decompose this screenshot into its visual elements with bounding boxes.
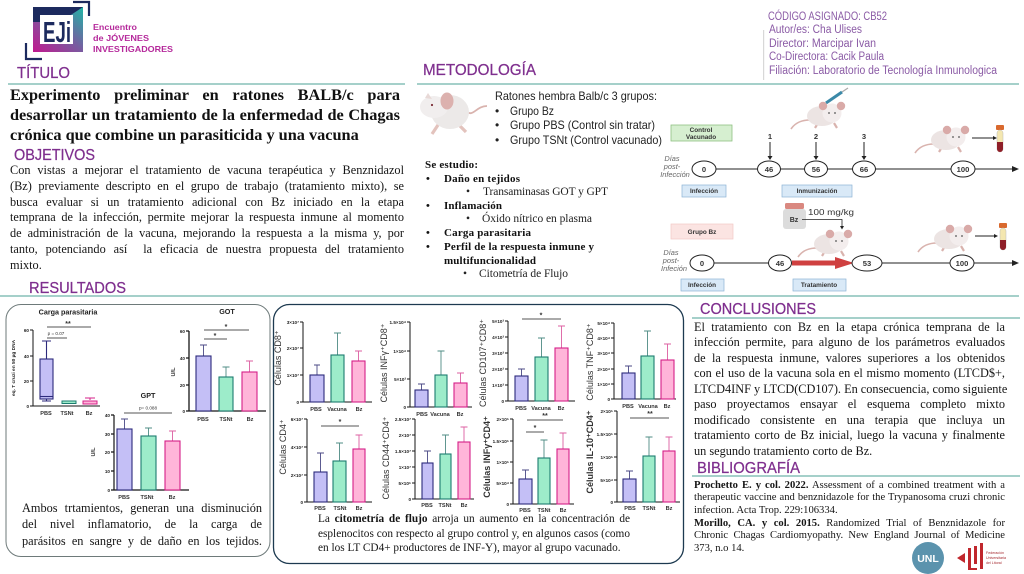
chart: células CD4: 2×10⁷: [291, 473, 303, 478]
chart: GOT: *: [225, 324, 228, 331]
chart: células IL-10 CD4: 1.5×10⁵: [597, 432, 613, 437]
conclusions text: [694, 320, 1007, 458]
chart: células INFγ CD4: 2×10⁵: [496, 417, 509, 422]
chart: GPT: p= 0.088: [139, 406, 157, 410]
timeline: grupo Bz: 46: [776, 259, 784, 268]
chart: células INFγ CD4: Bz: [560, 508, 567, 514]
label: control vacunado: Control: [690, 127, 713, 134]
author block: [768, 10, 998, 77]
objectives text: (Bz) previamente descripto en el grupo de trabajo (tratamiento mixto), se: [10, 179, 404, 193]
chart: células TNF CD8: 1×10⁴: [597, 382, 611, 387]
chart: células TNF CD8: [585, 321, 676, 410]
chart: células CD44 CD4: [381, 416, 474, 509]
chart: carga parasitaria: eq. T cruzi en 50 µg DNA: [11, 339, 17, 396]
timeline: control vacunado: 56: [812, 165, 820, 174]
bibliography text: Morillo, CA. y col. 2015. Randomized Trial of Benznidazole for: [694, 518, 1005, 529]
chart: GPT: TSNt: [140, 495, 154, 501]
chart: células CD107 CD8: Células CD107⁺CD8⁺: [478, 319, 488, 407]
timeline: grupo Bz: 53: [863, 259, 871, 268]
timeline: control vacunado: post-: [663, 162, 681, 171]
timeline: control vacunado: Días: [664, 154, 680, 163]
timeline: grupo Bz: Infeción: [661, 264, 687, 273]
author block: Director: Marcipar Ivan: [769, 38, 876, 50]
chart: células TNF CD8: PBS: [622, 404, 634, 410]
chart: células CD8: Células CD8⁺: [273, 330, 283, 386]
chart: células INFγ CD8: [379, 320, 472, 418]
chart: células CD44 CD4: PBS: [421, 503, 433, 509]
chart: carga parasitaria: **: [65, 321, 71, 328]
heading: conclusiones: CONCLUSIONES: [700, 301, 816, 318]
groups list: Grupo PBS (Control sin tratar): [510, 118, 655, 132]
heading: metodología: METODOLOGÍA: [423, 62, 537, 79]
study list: Transaminasas GOT y GPT: [483, 186, 608, 198]
chart: células CD44 CD4: 0: [408, 497, 411, 502]
chart: células IL-10 CD4: PBS: [624, 506, 636, 512]
logo: Encuentro de Jóvenes Investigadores: Encuentro: [93, 22, 137, 32]
chart: carga parasitaria: 20: [24, 379, 29, 384]
timeline: grupo Bz: Infección: [688, 282, 716, 289]
chart: GPT: 20: [105, 450, 110, 455]
chart: células INFγ CD8: Células INFγ⁺CD8⁺: [379, 323, 389, 403]
chart: células CD107 CD8: 3×10³: [492, 351, 504, 356]
study list: [425, 159, 608, 280]
chart: células INFγ CD4: Células INFγ⁺CD4⁺: [482, 416, 492, 498]
study list: •: [466, 186, 470, 198]
chart: células CD4: Células CD4⁺: [278, 419, 288, 475]
chart: células CD4: 6×10⁷: [291, 417, 303, 422]
chart: células CD44 CD4: Células CD44⁺CD4⁺: [381, 416, 391, 500]
logo: Encuentro de Jóvenes Investigadores: EJi: [43, 17, 71, 49]
chart: GPT: [91, 391, 189, 501]
timeline: control vacunado: Infección: [690, 188, 718, 195]
logo: UNL: [912, 542, 944, 574]
chart: células INFγ CD4: 1×10⁵: [496, 460, 509, 465]
study list: •: [463, 268, 467, 280]
objectives text: temprana de la infección, permite mejorar la respuesta inmune al momento: [10, 210, 404, 224]
icon: large mouse: [420, 92, 487, 134]
chart: células CD8: Bz: [356, 407, 363, 413]
logo: Encuentro de Jóvenes Investigadores: [26, 2, 173, 59]
timeline: grupo Bz: 100: [956, 259, 968, 268]
bibliography text: Prochetto E. y col. 2022. Assessment of a combined treatment with a: [694, 480, 1005, 490]
chart: células CD8: Vacuna: [327, 407, 348, 413]
chart: células INFγ CD4: **: [542, 413, 548, 420]
groups list: Ratones hembra Balb/c 3 grupos:: [495, 89, 657, 103]
icon: Bz bottle: Bz: [790, 217, 799, 224]
chart: células IL-10 CD4: [585, 409, 680, 512]
chart: células CD4: TSNt: [333, 506, 347, 512]
chart: células TNF CD8: Células TNF⁺CD8⁺: [585, 323, 595, 401]
chart: células INFγ CD8: 1.5×10⁴: [390, 320, 407, 325]
timeline: grupo Bz: post-: [662, 256, 680, 265]
timeline: control vacunado: 2: [814, 132, 818, 141]
cytometry caption: La citometría de flujo arroja un aumento en la concentración de: [318, 513, 630, 525]
groups list: [495, 89, 662, 147]
chart: GOT: 60: [180, 329, 185, 334]
chart: células CD44 CD4: 2×10⁷: [399, 433, 411, 438]
chart: células INFγ CD4: [482, 413, 574, 514]
timeline: control vacunado: Infección: [660, 170, 690, 179]
chart: células CD44 CD4: 2.5×10⁷: [395, 417, 411, 422]
left results caption: Ambos trtamientos, generan una disminución: [22, 501, 262, 515]
chart: células INFγ CD8: 1×10⁴: [393, 349, 407, 354]
chart: células INFγ CD4: 1.5×10⁵: [493, 439, 509, 444]
chart: carga parasitaria: p = 0.07: [48, 331, 65, 336]
conclusions text: infección permite, para alguno de los parámetros evaluados: [694, 335, 1005, 349]
chart: GOT: TSNt: [219, 417, 233, 423]
label: control vacunado: Vacunado: [686, 134, 716, 141]
chart: GOT: *: [214, 333, 217, 340]
label: grupo Bz: Grupo Bz: [688, 229, 716, 236]
chart: células CD8: 3×10⁷: [287, 320, 299, 325]
chart: células CD107 CD8: PBS: [515, 406, 527, 412]
chart: GOT: Bz: [247, 417, 254, 423]
author block: Autor/es: Cha Ulises: [769, 24, 862, 36]
conclusions text: modificado consistente en una terapia que incluya un: [694, 412, 1005, 426]
chart: células TNF CD8: Vacuna: [638, 404, 659, 410]
chart: carga parasitaria: Bz: [86, 411, 93, 417]
logo: Encuentro de Jóvenes Investigadores: de JÓVENES: [93, 32, 149, 43]
chart: GOT: 0: [182, 409, 185, 414]
chart: células CD4: 0: [300, 500, 303, 505]
bibliography text: infection. Acta Trop. 229:106334.: [694, 505, 838, 516]
chart: células IL-10 CD4: **: [647, 411, 653, 418]
conclusions text: El tratamiento con Bz en la etapa crónica temprana de la: [694, 320, 1005, 334]
conclusions text: paso proyectamos ensayar el esquema completo mixto: [694, 397, 1005, 411]
study list: Inflamación: [444, 200, 502, 212]
icon: treated mouse: [798, 230, 852, 257]
study list: •: [426, 200, 430, 212]
chart: células TNF CD8: 2×10⁴: [597, 367, 611, 372]
chart: células CD8: [273, 320, 372, 413]
chart: células CD4: Bz: [356, 506, 363, 512]
chart: GOT: 20: [180, 383, 185, 388]
logo: Federación Universitaria del Litoral: del Litoral: [986, 561, 1002, 565]
groups list: Grupo Bz: [510, 104, 554, 118]
chart: carga parasitaria: 0: [26, 404, 29, 409]
timeline: control vacunado: 1: [768, 132, 773, 141]
chart: células TNF CD8: 0: [607, 397, 610, 402]
chart: células INFγ CD8: 0: [403, 405, 406, 410]
chart: células CD4: *: [339, 419, 342, 426]
author block: CÓDIGO ASIGNADO: CB52: [768, 10, 887, 23]
chart: células TNF CD8: 3×10⁴: [597, 351, 611, 356]
conclusions text: con el uso de la vacuna sola en el mismo momento (LTCD$+,: [694, 366, 1005, 380]
timeline: control vacunado: [660, 88, 1019, 197]
chart: células CD8: 1×10⁷: [287, 373, 299, 378]
cytometry caption: [318, 512, 630, 556]
chart: carga parasitaria: TSNt: [60, 411, 74, 417]
logo: UNL: UNL: [917, 553, 939, 565]
chart: carga parasitaria: 40: [24, 354, 29, 359]
chart: células IL-10 CD4: Células IL-10⁺CD4⁺: [585, 410, 595, 494]
heading: resultados: RESULTADOS: [29, 280, 126, 297]
title text: Experimento preliminar en ratones BALB/c para: [10, 85, 400, 104]
logo: Federación Universitaria del Litoral: [957, 543, 1006, 570]
chart: carga parasitaria: 60: [24, 328, 29, 333]
timeline: control vacunado: 46: [765, 165, 773, 174]
study list: Citometría de Flujo: [479, 268, 568, 280]
author block: Filiación: Laboratorio de Tecnología Inmunologica: [769, 65, 998, 77]
chart: GOT: GOT: [219, 307, 235, 316]
author block: Co-Directora: Cacik Paula: [769, 51, 885, 63]
icon: mouse to blood sample: [918, 223, 1007, 252]
chart: células CD44 CD4: Bz: [461, 503, 468, 509]
chart: células IL-10 CD4: 2×10⁵: [600, 409, 613, 414]
chart: células CD107 CD8: 4×10³: [492, 335, 504, 340]
bibliography text: therapeutic vaccine and benznidazole for the Trypanosoma cruzi chronic: [694, 492, 1005, 503]
chart: células CD44 CD4: 5×10⁶: [399, 481, 411, 486]
chart: células CD8: 0: [296, 400, 299, 405]
heading: objetivos: OBJETIVOS: [14, 147, 95, 164]
study list: •: [466, 213, 470, 225]
chart: células CD4: 4×10⁷: [291, 445, 303, 450]
chart: GPT: U/L: [91, 447, 97, 457]
chart: GPT: 10: [105, 469, 110, 474]
chart: células INFγ CD4: TSNt: [537, 508, 551, 514]
objectives text: busca evaluar si un tratamiento adicional con Bz iniciado en la etapa: [10, 195, 404, 209]
chart: células CD8: 2×10⁷: [287, 346, 299, 351]
bibliography text: Chronic Chagas Cardiomyopathy. New England Journal of Medicine: [694, 530, 1005, 541]
conclusions text: de la respuesta inmune, valores superiores a los obtenidos: [694, 350, 1005, 364]
icon: mouse to blood sample: [915, 125, 1004, 153]
objectives text: [10, 163, 404, 272]
chart: células CD107 CD8: Vacuna: [531, 406, 552, 412]
timeline: grupo Bz: [661, 203, 1019, 291]
conclusions text: tratamiento corto de Bz inicial, luego la vacuna y finalmente: [694, 428, 1005, 442]
icon: Bz bottle: [783, 203, 806, 229]
chart: GPT: PBS: [118, 495, 130, 501]
chart: células CD8: PBS: [310, 407, 322, 413]
chart: células INFγ CD4: 5×10⁴: [496, 481, 510, 486]
arrow: tratamiento: [792, 257, 854, 269]
chart: células CD107 CD8: 1×10³: [492, 383, 504, 388]
study list: •: [426, 173, 430, 185]
panel: left charts frame: [6, 304, 270, 556]
heading: título: TÍTULO: [17, 65, 70, 82]
icon: syringe and mouse: [791, 88, 848, 129]
heading: bibliografía: BIBLIOGRAFÍA: [697, 460, 801, 477]
study list: Carga parasitaria: [444, 227, 532, 239]
panel: flow cytometry frame: [274, 304, 684, 564]
chart: células INFγ CD8: Bz: [457, 412, 464, 418]
logo: Encuentro de Jóvenes Investigadores: INVESTIGADORES: [93, 44, 173, 54]
chart: células INFγ CD4: *: [534, 425, 537, 432]
chart: carga parasitaria: [11, 308, 100, 417]
left results caption: parásitos en sangre y de daño en los tejidos.: [22, 534, 262, 548]
chart: células IL-10 CD4: TSNt: [642, 506, 656, 512]
groups list: •: [495, 104, 499, 118]
chart: GOT: [171, 307, 266, 423]
chart: GOT: U/L: [171, 367, 177, 377]
chart: GOT: PBS: [197, 417, 209, 423]
conclusions text: LTCD4INF y LTCD(CD107). En consecuencia, como siguiente: [694, 382, 1007, 396]
study list: Daño en tejidos: [444, 173, 521, 185]
chart: células INFγ CD4: 0: [506, 502, 509, 507]
timeline: control vacunado: Inmunización: [797, 188, 838, 195]
cytometry caption: esplenocitos con respecto al grupo control y, en algunos casos (como: [318, 528, 630, 540]
timeline: control vacunado: 66: [860, 165, 868, 174]
chart: GPT: 40: [105, 413, 110, 418]
chart: células IL-10 CD4: 0: [610, 500, 613, 505]
objectives text: de administración de la vacuna, mejorando la respuesta a la misma y, por: [10, 226, 404, 240]
logo: Federación Universitaria del Litoral: Universitaria: [986, 556, 1006, 560]
chart: células IL-10 CD4: Bz: [666, 506, 673, 512]
conclusions text: un segundo tratamiento corto de Bz.: [694, 444, 872, 458]
cytometry caption: en los LT CD4+ productores de INF-Y), mayor al grupo vacunado.: [318, 542, 621, 554]
timeline: control vacunado: 0: [702, 165, 706, 174]
chart: células CD107 CD8: 2×10³: [492, 367, 504, 372]
chart: GPT: 0: [107, 488, 110, 493]
chart: células CD44 CD4: 1.5×10⁷: [395, 449, 411, 454]
timeline: grupo Bz: Días: [663, 248, 679, 257]
chart: células CD107 CD8: [478, 312, 575, 412]
chart: células CD44 CD4: 1×10⁷: [399, 465, 411, 470]
study list: multifuncionalidad: [444, 255, 536, 267]
chart: células CD107 CD8: 5×10³: [492, 319, 504, 324]
chart: células IL-10 CD4: 5×10⁴: [600, 478, 614, 483]
left results caption: [22, 501, 262, 548]
chart: células TNF CD8: 5×10⁴: [597, 321, 611, 326]
bibliography text: 373, n.o 14.: [694, 543, 744, 554]
study list: Perfil de la respuesta inmune y: [444, 241, 594, 253]
study list: Óxido nítrico en plasma: [482, 211, 592, 225]
title text: [10, 85, 400, 144]
chart: GPT: GPT: [141, 391, 156, 400]
study list: •: [426, 227, 430, 239]
section rules: [0, 30, 1020, 477]
groups list: Grupo TSNt (Control vacunado): [510, 133, 662, 147]
label: control vacunado: [671, 125, 732, 141]
chart: células TNF CD8: 4×10⁴: [597, 336, 611, 341]
timeline: grupo Bz: 0: [700, 259, 704, 268]
chart: células INFγ CD4: PBS: [519, 508, 531, 514]
chart: células INFγ CD8: PBS: [416, 412, 428, 418]
chart: células CD107 CD8: *: [540, 312, 543, 320]
chart: GOT: 40: [180, 356, 185, 361]
chart: carga parasitaria: Carga parasitaria: [39, 308, 98, 316]
objectives text: mixto.: [10, 258, 42, 272]
chart: células CD4: [278, 417, 372, 512]
logo: Federación Universitaria del Litoral: Federación: [986, 551, 1004, 555]
timeline: grupo Bz: 100 mg/kg: [808, 208, 854, 217]
chart: células CD4: PBS: [314, 506, 326, 512]
chart: GPT: Bz: [169, 495, 176, 501]
title text: crónica que combine un parasiticida y una vacuna: [10, 125, 359, 144]
chart: células IL-10 CD4: 1×10⁵: [600, 455, 613, 460]
chart: carga parasitaria: PBS: [40, 411, 52, 417]
chart: células CD107 CD8: 0: [501, 399, 504, 404]
bibliography text: [694, 480, 1005, 554]
chart: células TNF CD8: Bz: [664, 404, 671, 410]
chart: células CD107 CD8: Bz: [558, 406, 565, 412]
chart: GPT: 30: [105, 432, 110, 437]
groups list: •: [495, 118, 499, 132]
timeline: control vacunado: 100: [957, 165, 969, 174]
title text: desarrollar un tratamiento de la enfermedad de Chagas: [10, 105, 400, 124]
timeline: grupo Bz: Tratamiento: [801, 282, 837, 289]
groups list: •: [495, 133, 499, 147]
left results caption: del nivel inflamatorio, de la carga de: [22, 517, 262, 531]
chart: células INFγ CD8: 5×10³: [394, 377, 406, 382]
label: grupo Bz: [671, 224, 733, 239]
objectives text: tanto, potenciando así la eficacia de nuestra propuesta del tratamiento: [10, 242, 404, 256]
chart: células CD44 CD4: TSNt: [438, 503, 452, 509]
chart: células INFγ CD8: Vacuna: [430, 412, 451, 418]
study list: Se estudio:: [425, 159, 478, 171]
objectives text: Con vistas a mejorar el tratamiento de vacuna terapéutica y Benznidazol: [10, 163, 404, 177]
timeline: control vacunado: 3: [862, 132, 866, 141]
study list: •: [426, 241, 430, 253]
